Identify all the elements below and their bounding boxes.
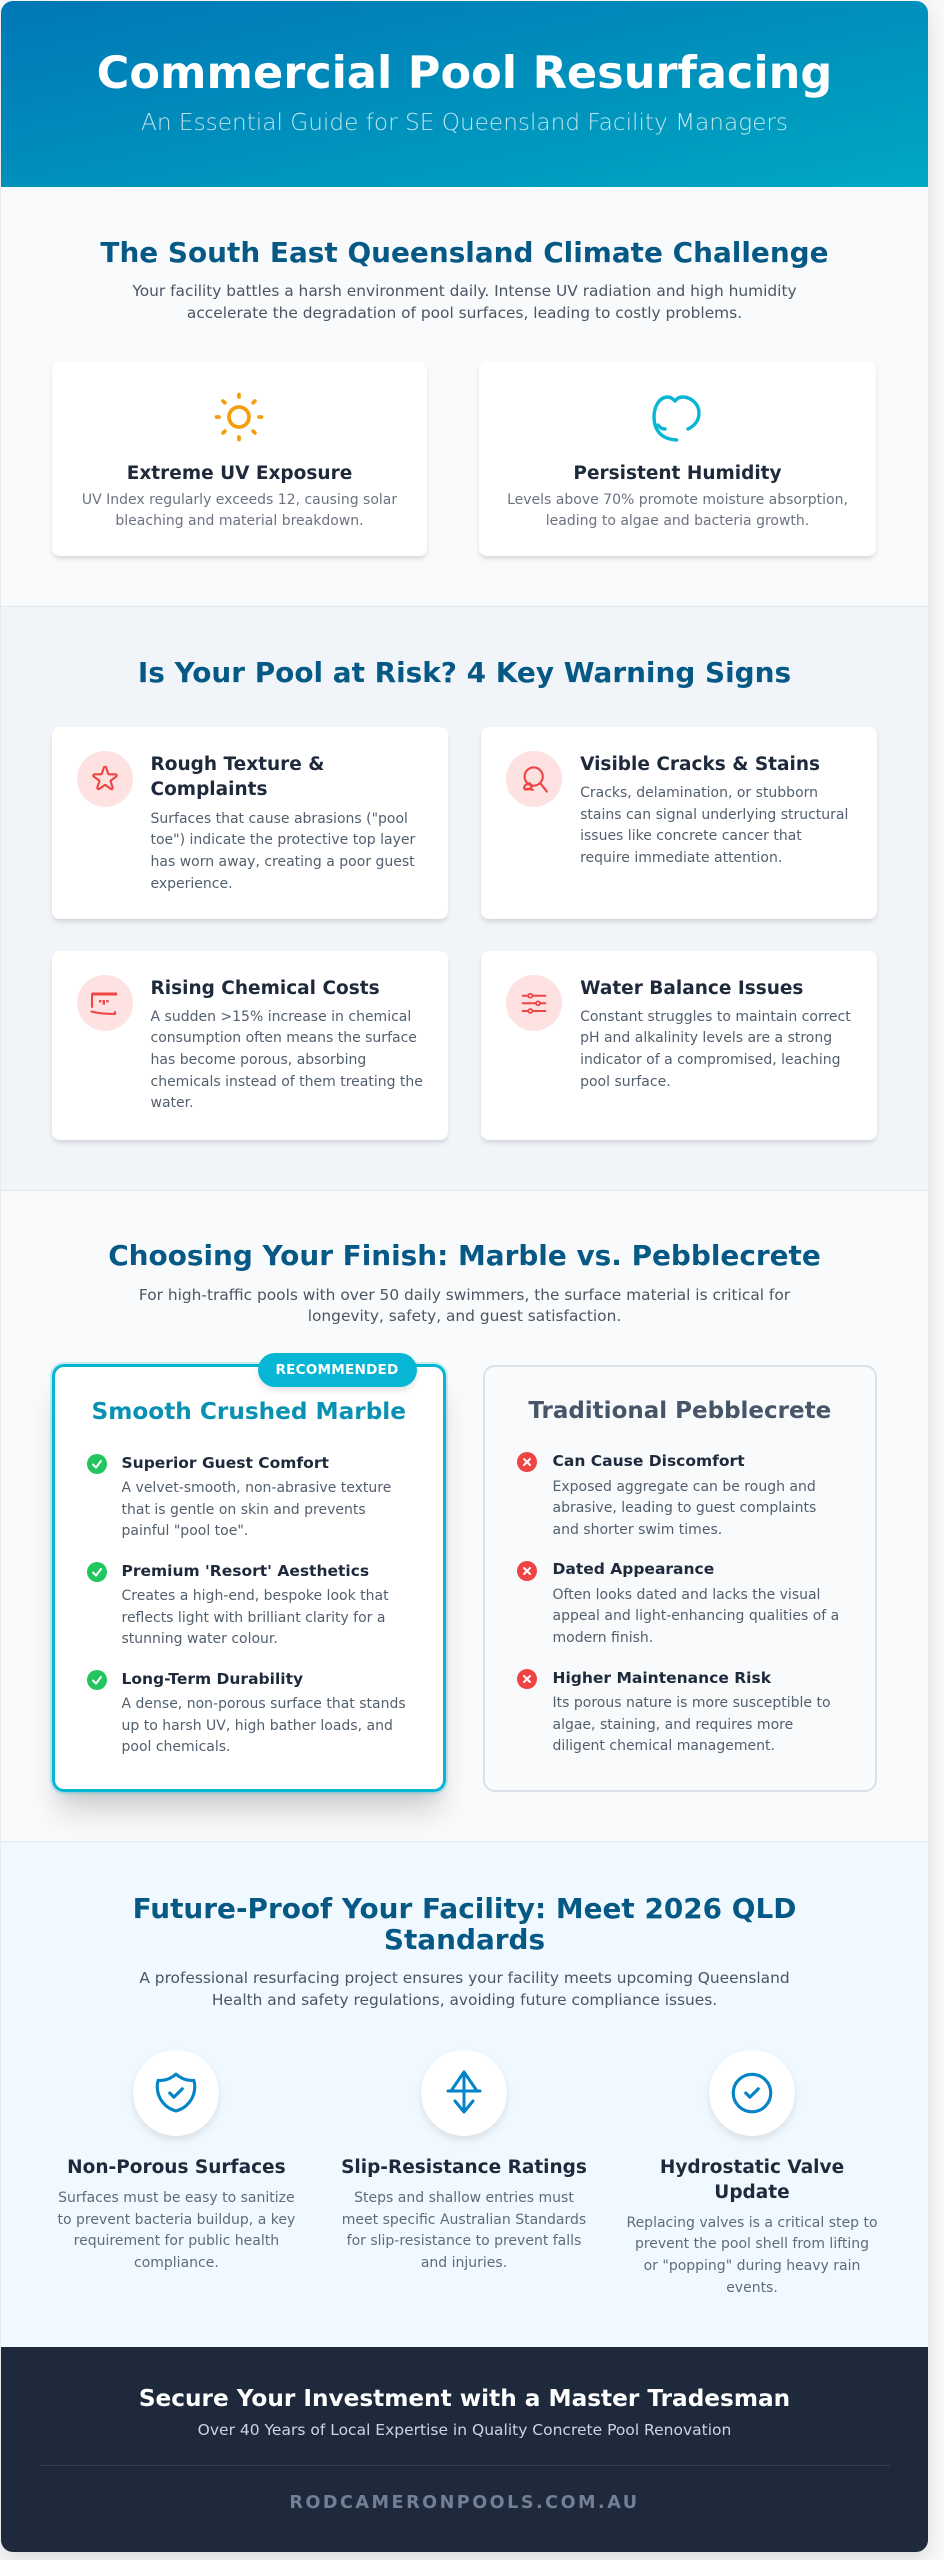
header banner: [1, 1, 928, 187]
card text: rough texture: [150, 810, 416, 892]
intro text: standards: Health and safety regulations, avoiding future compliance issues.: [212, 1991, 717, 2009]
card title: humidity: Persistent Humidity: [573, 463, 782, 484]
panel: 2026 standards: [1, 1842, 928, 2347]
icon: cross appearance: [517, 1561, 537, 1581]
icon: sliders: [506, 975, 562, 1031]
item title: appearance: Dated Appearance: [552, 1560, 714, 1578]
column text: slip: meet specific Australian Standards: [342, 2212, 586, 2228]
column text: non-porous: to prevent bacteria buildup, a key: [58, 2212, 295, 2228]
icon: slip arrows: [421, 2050, 507, 2136]
icon: cross maintenance: [517, 1669, 537, 1689]
card text: rough texture: Surfaces that cause abrasions ("pool: [150, 810, 408, 826]
item text: maintenance: [552, 1695, 831, 1754]
badge: recommended: RECOMMENDED: [275, 1362, 399, 1378]
card title: chemical costs: Rising Chemical Costs: [150, 978, 380, 999]
heading: warning signs: Is Your Pool at Risk? 4 Key Warning Signs: [138, 656, 791, 689]
card text: chemical costs: A sudden >15% increase in chemical: [150, 1009, 411, 1025]
column text: hydrostatic: events.: [726, 2280, 778, 2296]
card text: rough texture: has worn away, creating a poor guest: [150, 854, 415, 870]
heading: climate challenge: The South East Queensland Climate Challenge: [100, 236, 829, 269]
card title: rough texture: Rough Texture &: [150, 754, 324, 775]
card: water balance: [481, 951, 877, 1140]
item text: comfort: that is gentle on skin and prevents: [122, 1502, 366, 1518]
card text: cracks: issues like concrete cancer that: [580, 828, 802, 844]
item text: appearance: [552, 1586, 839, 1646]
item title: maintenance: Higher Maintenance Risk: [552, 1669, 771, 1687]
item text: comfort: [122, 1480, 391, 1539]
card text: chemical costs: [150, 1009, 423, 1111]
card: traditional pebblecrete: [483, 1365, 876, 1792]
card text: water balance: [580, 1009, 851, 1090]
badge: recommended: [258, 1353, 416, 1387]
card text: water balance: indicator of a compromised, leaching: [580, 1052, 840, 1068]
card: humidity: [479, 362, 876, 556]
icon: check comfort: [87, 1454, 107, 1474]
footer: [1, 2347, 928, 2552]
icon: sun: [214, 392, 264, 442]
card: chemical costs: [52, 951, 448, 1140]
footer tagline: Over 40 Years of Local Expertise in Quality Concrete Pool Renovation: [198, 2421, 731, 2439]
card title: cracks: Visible Cracks & Stains: [580, 754, 820, 775]
item text: aesthetics: Creates a high-end, bespoke look that: [122, 1588, 389, 1604]
intro text: finish: longevity, safety, and guest satisfaction.: [308, 1307, 621, 1325]
card text: UV: bleaching and material breakdown.: [115, 513, 364, 529]
item text: appearance: modern finish.: [552, 1630, 653, 1646]
column text: slip: [342, 2190, 586, 2271]
item text: discomfort: [552, 1478, 816, 1538]
icon: star: [77, 751, 133, 807]
icon: check aesthetics: [87, 1562, 107, 1582]
column title: non-porous: Non-Porous Surfaces: [67, 2157, 286, 2178]
heading: standards: [133, 1892, 796, 1956]
card: rough texture: [52, 727, 448, 919]
card text: rough texture: toe") indicate the protective top layer: [150, 832, 415, 848]
item text: durability: [122, 1696, 406, 1755]
intro text: standards: [139, 1969, 790, 2009]
card text: chemical costs: consumption often means the surface: [150, 1030, 417, 1046]
column text: non-porous: compliance.: [134, 2255, 219, 2271]
item text: aesthetics: stunning water colour.: [122, 1631, 278, 1647]
item title: comfort: Superior Guest Comfort: [122, 1454, 329, 1472]
column text: slip: for slip-resistance to prevent falls: [347, 2233, 581, 2249]
heading: standards: Standards: [384, 1922, 545, 1956]
item text: durability: A dense, non-porous surface that stands: [122, 1696, 406, 1712]
card text: cracks: Cracks, delamination, or stubborn: [580, 785, 818, 801]
column title: slip: Slip-Resistance Ratings: [341, 2157, 587, 2178]
item text: durability: up to harsh UV, high bather loads, and: [122, 1718, 393, 1734]
column title: hydrostatic: [660, 2157, 844, 2203]
icon: shield check: [133, 2050, 219, 2136]
column text: hydrostatic: or "popping" during heavy rain: [644, 2258, 860, 2274]
column: non-porous surfaces: [58, 2050, 295, 2271]
subtitle: An Essential Guide for SE Queensland Facility Managers: [141, 109, 788, 136]
card text: UV: [82, 492, 398, 529]
card text: cracks: [580, 785, 848, 866]
item text: maintenance: Its porous nature is more susceptible to: [552, 1695, 831, 1711]
column title: hydrostatic: Update: [714, 2182, 790, 2203]
heading: finish comparison: Choosing Your Finish: Marble vs. Pebblecrete: [108, 1239, 821, 1272]
column text: hydrostatic: [626, 2214, 878, 2296]
card text: water balance: pool surface.: [580, 1074, 671, 1090]
column title: hydrostatic: Hydrostatic Valve: [660, 2157, 844, 2178]
column text: slip: Steps and shallow entries must: [354, 2190, 574, 2206]
item text: discomfort: abrasive, leading to guest complaints: [552, 1500, 816, 1516]
icon: magnifier crack: [506, 751, 562, 807]
item text: maintenance: diligent chemical management.: [552, 1738, 775, 1754]
column text: non-porous: Surfaces must be easy to sanitize: [58, 2190, 295, 2206]
card text: humidity: leading to algae and bacteria growth.: [546, 513, 809, 529]
panel: finish comparison: [1, 1191, 928, 1842]
item text: comfort: A velvet-smooth, non-abrasive texture: [122, 1480, 391, 1496]
card text: cracks: stains can signal underlying structural: [580, 807, 848, 823]
panel: climate challenge: [1, 187, 928, 607]
card title: marble: Smooth Crushed Marble: [92, 1398, 406, 1425]
icon: check durability: [87, 1670, 107, 1690]
card text: rough texture: experience.: [150, 876, 233, 892]
intro text: finish: For high-traffic pools with over 50 daily swimmers, the surface material is critical for: [139, 1286, 790, 1304]
card title: water balance: Water Balance Issues: [580, 978, 803, 999]
icon: check circle: [709, 2050, 795, 2136]
intro text: finish: [139, 1286, 790, 1325]
item title: discomfort: Can Cause Discomfort: [552, 1452, 745, 1470]
intro text: standards: A professional resurfacing project ensures your facility meets upcoming Queensland: [139, 1969, 790, 1987]
intro text: climate: accelerate the degradation of pool surfaces, leading to costly problems.: [187, 304, 742, 322]
card text: chemical costs: water.: [150, 1095, 194, 1111]
card text: humidity: [507, 492, 848, 529]
card text: chemical costs: chemicals instead of them treating the: [150, 1074, 423, 1090]
footer heading: Secure Your Investment with a Master Tradesman: [139, 2385, 790, 2412]
card text: chemical costs: has become porous, absorbing: [150, 1052, 366, 1068]
card: cracks and stains: [481, 727, 877, 919]
card text: cracks: require immediate attention.: [580, 850, 782, 866]
column text: hydrostatic: Replacing valves is a critical step to: [626, 2214, 878, 2230]
card text: humidity: Levels above 70% promote moisture absorption,: [507, 492, 848, 508]
icon: chemical chart: [77, 975, 133, 1031]
item text: durability: pool chemicals.: [122, 1739, 230, 1755]
column text: slip: and injuries.: [421, 2255, 507, 2271]
card title: rough texture: Complaints: [150, 779, 268, 800]
item text: appearance: appeal and light-enhancing qualities of a: [552, 1608, 839, 1624]
heading: standards: Future-Proof Your Facility: Meet 2026 QLD: [133, 1892, 796, 1924]
card: UV exposure: [52, 362, 427, 556]
intro text: climate: [132, 282, 797, 322]
card text: water balance: pH and alkalinity levels are a strong: [580, 1030, 832, 1046]
item text: discomfort: Exposed aggregate can be rough and: [552, 1478, 816, 1494]
column text: non-porous: [58, 2190, 295, 2271]
card: smooth crushed marble: [52, 1364, 446, 1792]
item text: maintenance: algae, staining, and requires more: [552, 1717, 793, 1733]
icon: humidity: [652, 395, 701, 442]
column text: non-porous: requirement for public health: [74, 2233, 279, 2249]
icon: cross discomfort: [517, 1452, 537, 1472]
item text: discomfort: and shorter swim times.: [552, 1522, 722, 1538]
item text: aesthetics: [122, 1588, 389, 1647]
title: Commercial Pool Resurfacing: [97, 47, 832, 99]
card text: water balance: Constant struggles to maintain correct: [580, 1009, 851, 1025]
item title: aesthetics: Premium 'Resort' Aesthetics: [122, 1562, 369, 1580]
panel: warning signs: [1, 607, 928, 1191]
footer website: RODCAMERONPOOLS.COM.AU: [289, 2493, 640, 2513]
intro text: climate: Your facility battles a harsh environment daily. Intense UV radiation and high humidity: [132, 282, 797, 300]
item title: durability: Long-Term Durability: [122, 1670, 303, 1688]
card title: rough texture: [150, 754, 324, 800]
column: hydrostatic valve: [626, 2050, 878, 2296]
item text: comfort: painful "pool toe".: [122, 1523, 248, 1539]
item text: appearance: Often looks dated and lacks the visual: [552, 1586, 820, 1602]
card text: UV: UV Index regularly exceeds 12, causing solar: [82, 492, 397, 508]
column text: hydrostatic: prevent the pool shell from lifting: [635, 2236, 869, 2252]
card title: pebblecrete: Traditional Pebblecrete: [528, 1398, 831, 1424]
item text: aesthetics: reflects light with brilliant clarity for a: [122, 1610, 385, 1626]
column: slip resistance: [341, 2050, 587, 2271]
card title: UV: Extreme UV Exposure: [127, 463, 352, 484]
